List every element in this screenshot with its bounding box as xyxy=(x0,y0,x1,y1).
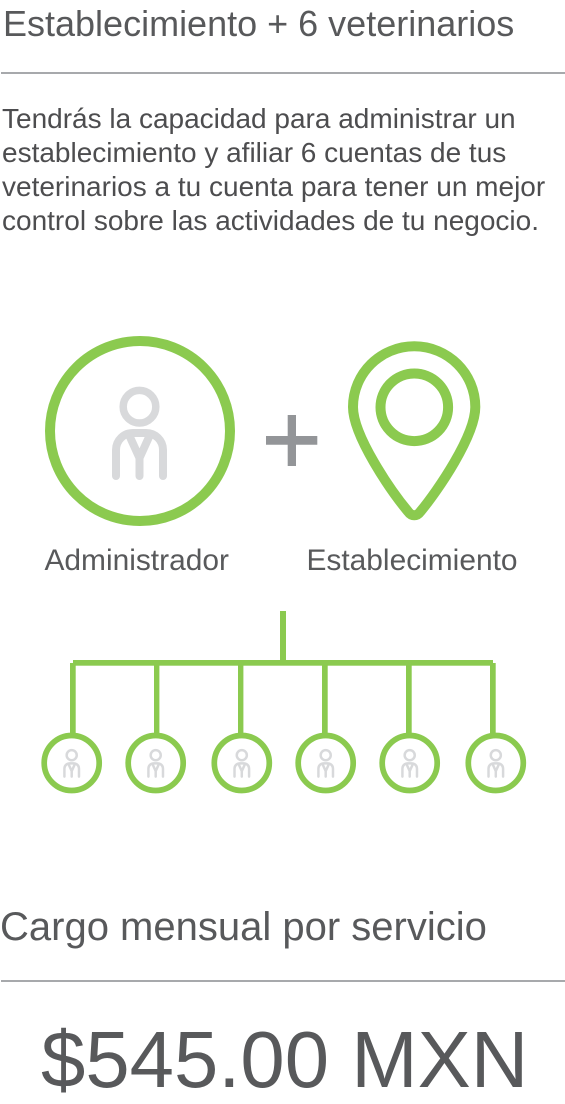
price: $545.00 MXN xyxy=(41,1015,528,1104)
veterinarian 6 xyxy=(468,736,523,790)
veterinarian 3 xyxy=(214,736,269,790)
description text: establecimiento y afiliar 6 cuentas de tus xyxy=(2,137,506,168)
icon: plus xyxy=(266,415,317,466)
veterinarian 2 xyxy=(128,736,183,790)
veterinarian 5 xyxy=(382,736,437,790)
connector tree xyxy=(70,611,496,735)
title: Establecimiento + 6 veterinarios xyxy=(3,3,514,44)
veterinarian 1 xyxy=(44,736,99,790)
icon: location pin xyxy=(353,346,475,515)
icon: administrator xyxy=(50,341,230,521)
label: Administrador: Administrador xyxy=(44,544,229,577)
description text: control sobre las actividades de tu negocio. xyxy=(2,205,539,236)
description text: veterinarios a tu cuenta para tener un mejor xyxy=(2,171,545,202)
heading: monthly charge: Cargo mensual por servicio xyxy=(0,905,487,949)
veterinarian 4 xyxy=(298,736,353,790)
description text: Tendrás la capacidad para administrar un xyxy=(2,103,516,134)
label: Establecimiento: Establecimiento xyxy=(306,544,518,577)
description text xyxy=(2,103,545,236)
